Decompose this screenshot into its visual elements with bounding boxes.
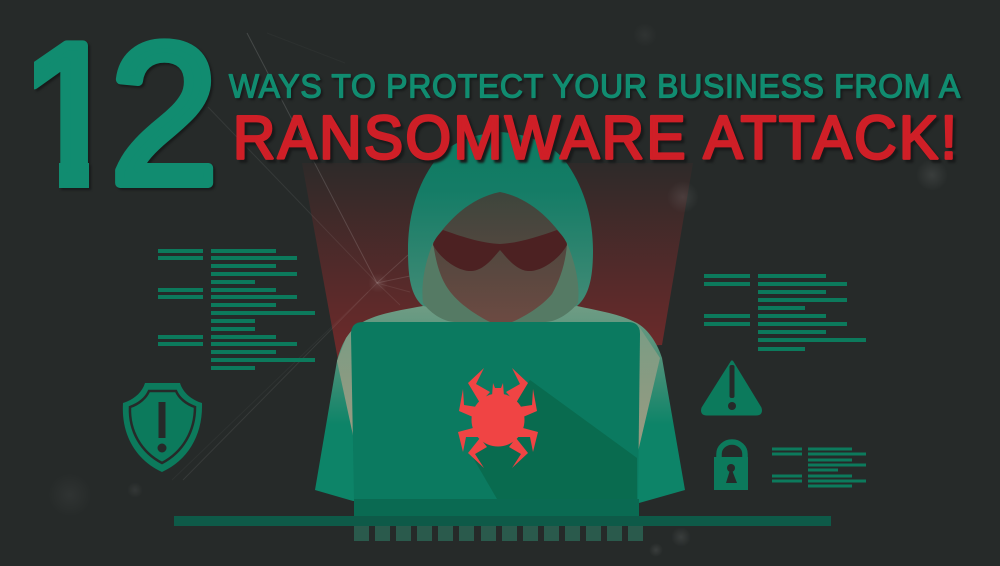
face bbox=[433, 192, 567, 322]
title number 12: 2 bbox=[110, 2, 218, 226]
icon: padlock bbox=[714, 442, 748, 490]
icon: warning triangle bbox=[702, 362, 760, 414]
code lines left bbox=[158, 249, 315, 370]
laptop base bbox=[354, 499, 639, 516]
icon: bug bbox=[458, 368, 538, 468]
code lines by lock bbox=[772, 448, 866, 488]
long shadow of bug bbox=[472, 380, 637, 499]
left shoulder highlight bbox=[337, 330, 354, 440]
keyboard keys bbox=[354, 526, 643, 541]
laptop bbox=[174, 322, 831, 541]
right shoulder highlight bbox=[637, 328, 660, 456]
hood bbox=[408, 132, 593, 322]
title line 2: RANSOMWARE ATTACK! bbox=[233, 103, 957, 172]
hacker figure bbox=[315, 132, 685, 503]
title number 12: 1 bbox=[15, 3, 126, 226]
hood inner lining bbox=[422, 243, 579, 322]
icon: shield bbox=[123, 383, 202, 472]
red light beam bbox=[302, 163, 693, 360]
title line 1: WAYS TO PROTECT YOUR BUSINESS FROM A bbox=[229, 68, 961, 105]
code lines right bbox=[704, 274, 866, 351]
desk bar bbox=[174, 516, 831, 526]
sunglasses bbox=[433, 230, 567, 271]
laptop screen bbox=[351, 322, 640, 500]
title number 12 bbox=[34, 38, 215, 190]
body and shoulders bbox=[315, 306, 685, 503]
